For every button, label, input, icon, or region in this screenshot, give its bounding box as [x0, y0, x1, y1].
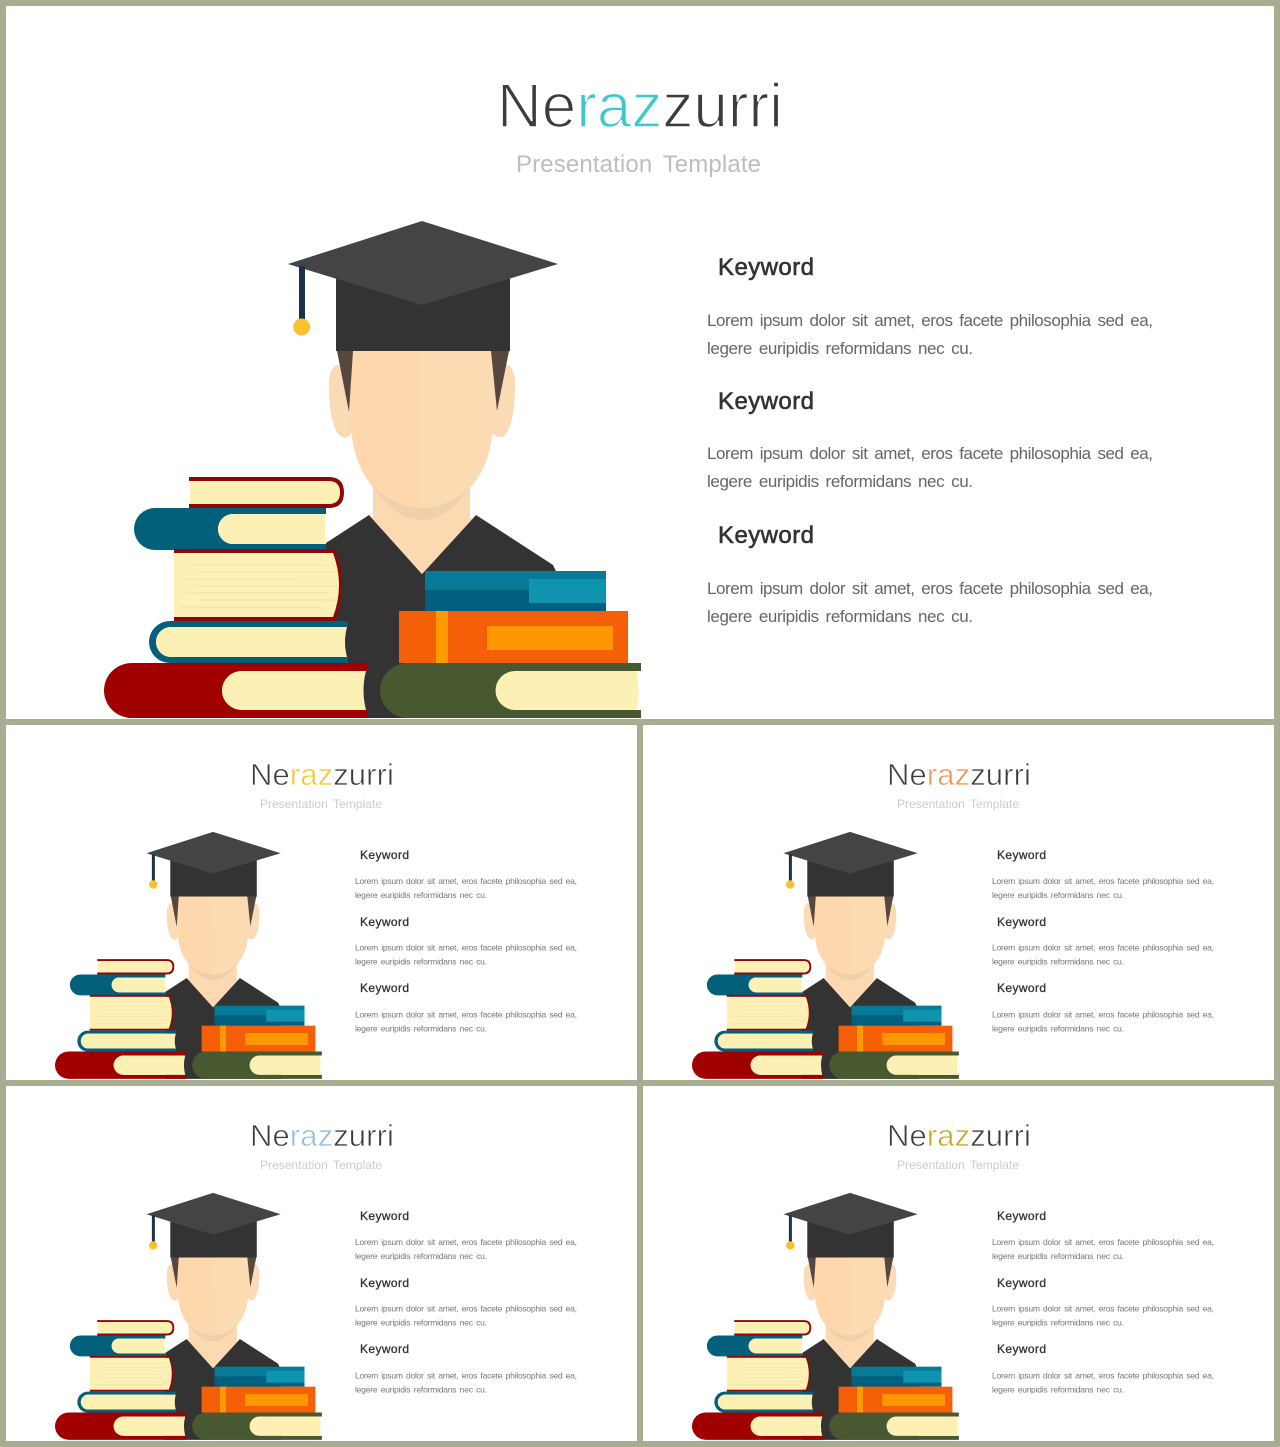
- keyword 1: legere euripidis reformidans nec cu.: [707, 339, 973, 358]
- keyword 3: Keyword: [718, 522, 814, 549]
- hair: [337, 351, 509, 412]
- text block: Lorem ipsum dolor sit amet, eros facete philosophia sed ea,: [355, 1370, 577, 1380]
- subtitle: Presentation Template: [260, 797, 382, 811]
- keyword 1: Lorem ipsum dolor sit amet, eros facete philosophia sed ea,: [707, 311, 1153, 330]
- text block: Lorem ipsum dolor sit amet, eros facete philosophia sed ea,: [992, 1010, 1214, 1020]
- keyword 1: [707, 254, 1153, 358]
- text block: Keyword: [360, 915, 409, 929]
- keyword 3: legere euripidis reformidans nec cu.: [707, 607, 973, 626]
- text block: legere euripidis reformidans nec cu.: [992, 890, 1124, 900]
- text block: Keyword: [360, 1276, 409, 1290]
- text block: Keyword: [997, 915, 1046, 929]
- text block: keywords: [707, 254, 1153, 626]
- subtitle: Presentation Template: [897, 797, 1019, 811]
- gown: [326, 515, 560, 718]
- text block: [992, 848, 1214, 1034]
- panel: main slide: [6, 6, 1274, 719]
- text block: legere euripidis reformidans nec cu.: [355, 1384, 487, 1394]
- illustration: [55, 832, 322, 1079]
- keyword 3: [707, 522, 1153, 626]
- text block: Lorem ipsum dolor sit amet, eros facete philosophia sed ea,: [992, 876, 1214, 886]
- keyword 2: [707, 388, 1153, 491]
- keyword 3: Lorem ipsum dolor sit amet, eros facete philosophia sed ea,: [707, 579, 1153, 598]
- text block: legere euripidis reformidans nec cu.: [992, 956, 1124, 966]
- text block: Lorem ipsum dolor sit amet, eros facete philosophia sed ea,: [992, 942, 1214, 952]
- text block: Keyword: [997, 1342, 1046, 1356]
- title: Nerazzurri: [497, 72, 783, 141]
- mortarboard cap: [288, 221, 558, 351]
- right book stack: [380, 571, 641, 718]
- keyword 2: Keyword: [718, 388, 814, 415]
- subtitle: Presentation Template: [897, 1158, 1019, 1172]
- text block: Lorem ipsum dolor sit amet, eros facete philosophia sed ea,: [992, 1370, 1214, 1380]
- title: Nerazzurri: [250, 1118, 394, 1153]
- text block: legere euripidis reformidans nec cu.: [355, 956, 487, 966]
- illustration: [55, 1193, 322, 1440]
- illustration: graduate with stacks of books: [104, 221, 641, 718]
- panel: yellow variant: [6, 725, 637, 1080]
- book: teal: [134, 508, 326, 550]
- text block: Keyword: [360, 1342, 409, 1356]
- text block: [992, 1209, 1214, 1394]
- panel: orange variant: [643, 725, 1274, 1080]
- text block: [355, 848, 577, 1034]
- ears: [329, 365, 515, 437]
- text block: Lorem ipsum dolor sit amet, eros facete philosophia sed ea,: [992, 1237, 1214, 1247]
- panel: olive variant: [643, 1086, 1274, 1441]
- subtitle: Presentation Template: [260, 1158, 382, 1172]
- subtitle: Presentation Template: [516, 151, 761, 178]
- book: blue: [425, 571, 606, 611]
- text block: Keyword: [997, 1209, 1046, 1223]
- text block: legere euripidis reformidans nec cu.: [355, 1318, 487, 1328]
- tassel: [293, 266, 310, 336]
- text block: [355, 1209, 577, 1394]
- book: orange: [399, 611, 628, 663]
- text block: legere euripidis reformidans nec cu.: [992, 1024, 1124, 1034]
- text block: legere euripidis reformidans nec cu.: [992, 1318, 1124, 1328]
- text block: Keyword: [360, 981, 409, 995]
- panel: blue variant: [6, 1086, 637, 1441]
- neck: [369, 480, 476, 574]
- text block: Lorem ipsum dolor sit amet, eros facete philosophia sed ea,: [355, 1304, 577, 1314]
- text block: Keyword: [360, 848, 409, 862]
- book: green: [380, 663, 641, 718]
- text block: Keyword: [997, 848, 1046, 862]
- book: top red: [189, 477, 344, 508]
- text block: legere euripidis reformidans nec cu.: [992, 1384, 1124, 1394]
- book: thick pages: [174, 549, 342, 621]
- book: large red: [104, 663, 368, 718]
- illustration: [692, 832, 959, 1079]
- text block: Keyword: [997, 1276, 1046, 1290]
- keyword 1: Keyword: [718, 254, 814, 281]
- text block: Lorem ipsum dolor sit amet, eros facete philosophia sed ea,: [355, 1010, 577, 1020]
- title: Nerazzurri: [887, 1118, 1031, 1153]
- text block: legere euripidis reformidans nec cu.: [355, 890, 487, 900]
- illustration: [692, 1193, 959, 1440]
- title: Nerazzurri: [250, 757, 394, 792]
- text block: legere euripidis reformidans nec cu.: [992, 1251, 1124, 1261]
- keyword 2: legere euripidis reformidans nec cu.: [707, 472, 973, 491]
- book: teal outline: [149, 621, 348, 663]
- keyword 2: Lorem ipsum dolor sit amet, eros facete philosophia sed ea,: [707, 444, 1153, 463]
- text block: Keyword: [997, 981, 1046, 995]
- text block: legere euripidis reformidans nec cu.: [355, 1024, 487, 1034]
- text block: Lorem ipsum dolor sit amet, eros facete philosophia sed ea,: [992, 1304, 1214, 1314]
- text block: Keyword: [360, 1209, 409, 1223]
- text block: Lorem ipsum dolor sit amet, eros facete philosophia sed ea,: [355, 942, 577, 952]
- text block: Lorem ipsum dolor sit amet, eros facete philosophia sed ea,: [355, 876, 577, 886]
- left book stack: [104, 477, 368, 718]
- text block: legere euripidis reformidans nec cu.: [355, 1251, 487, 1261]
- face: [351, 351, 493, 508]
- title: Nerazzurri: [887, 757, 1031, 792]
- text block: Lorem ipsum dolor sit amet, eros facete philosophia sed ea,: [355, 1237, 577, 1247]
